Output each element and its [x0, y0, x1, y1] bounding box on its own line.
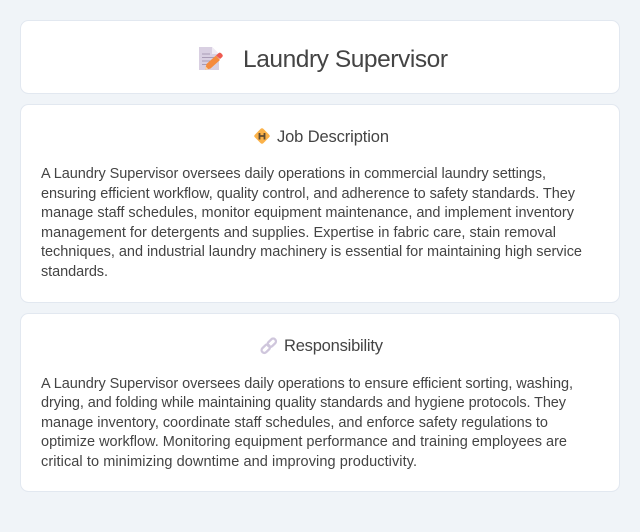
- text block: responsibility: manage inventory, coordinate staff schedules, and enforce safety regulations to: [41, 415, 548, 431]
- text block: job description: techniques, and industrial laundry machinery is essential for maintaining high service: [41, 244, 582, 260]
- text block: job description: A Laundry Supervisor oversees daily operations in commercial laundry settings,: [41, 166, 546, 182]
- text block: responsibility: critical to minimizing downtime and improving productivity.: [41, 454, 417, 470]
- text block: job description: ensuring efficient workflow, quality control, and adherence to safety standards. They: [41, 186, 576, 202]
- text block: job description: [41, 166, 582, 280]
- text block: responsibility: optimize workflow. Monitoring equipment performance and training employees are: [41, 434, 567, 450]
- text block: job description: standards.: [41, 264, 108, 280]
- icon: orange diamond sign: [254, 128, 270, 144]
- text block: job description: management for detergents and supplies. Expertise in fabric care, stain removal: [41, 225, 556, 241]
- icon: chain link: [260, 337, 277, 354]
- text block: job description: manage staff schedules, monitor equipment maintenance, and implement inventory: [41, 205, 575, 221]
- panel: title card: [20, 20, 620, 94]
- panel: job description: [20, 104, 620, 302]
- text block: responsibility: drying, and folding while maintaining quality standards and hygiene protocols. They: [41, 395, 567, 411]
- title: Laundry Supervisor: [243, 46, 448, 73]
- icon: document with pencil: [199, 47, 223, 70]
- text block: responsibility: [41, 376, 573, 470]
- text block: responsibility: A Laundry Supervisor oversees daily operations to ensure efficient sorting, washing,: [41, 376, 573, 392]
- panel: responsibility: [20, 314, 620, 492]
- heading: job description: Job Description: [277, 128, 389, 146]
- heading: responsibility: Responsibility: [284, 337, 384, 355]
